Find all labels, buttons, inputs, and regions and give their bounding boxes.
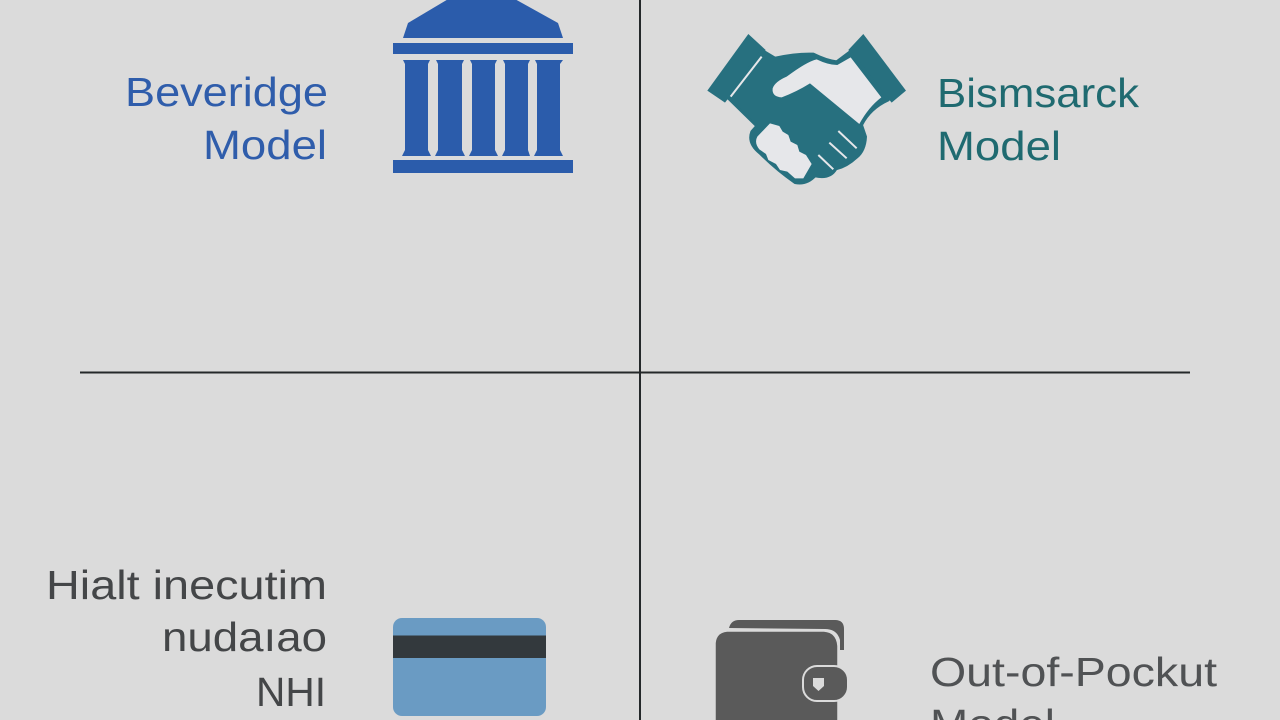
heading: Out-of-Pocket Model bbox=[930, 649, 1218, 720]
heading: NHI model: nudaıao bbox=[162, 614, 327, 660]
heading: NHI model bbox=[46, 562, 327, 715]
heading: Beveridge Model: Model bbox=[203, 122, 327, 168]
heading: NHI model: Hialt inecutim bbox=[46, 562, 327, 608]
icon: government building bbox=[393, 0, 573, 173]
heading: Out-of-Pocket Model: Out-of-Pockut bbox=[930, 649, 1218, 695]
heading: Bismarck Model bbox=[937, 70, 1140, 169]
panel: Out-of-Pocket Model bbox=[715, 620, 1218, 720]
panel: Bismarck Model bbox=[707, 34, 1140, 183]
heading: Beveridge Model: Beveridge bbox=[125, 69, 328, 115]
panel: Beveridge Model bbox=[125, 0, 573, 173]
icon: handshake bbox=[707, 34, 906, 183]
icon: insurance card bbox=[393, 618, 546, 716]
panel: NHI model bbox=[46, 562, 546, 716]
icon: wallet bbox=[715, 620, 848, 720]
heading: Bismarck Model: Model bbox=[937, 123, 1061, 169]
heading: Beveridge Model bbox=[125, 69, 328, 168]
heading: NHI model: NHI bbox=[256, 669, 326, 715]
heading: Bismarck Model: Bismsarck bbox=[937, 70, 1140, 116]
